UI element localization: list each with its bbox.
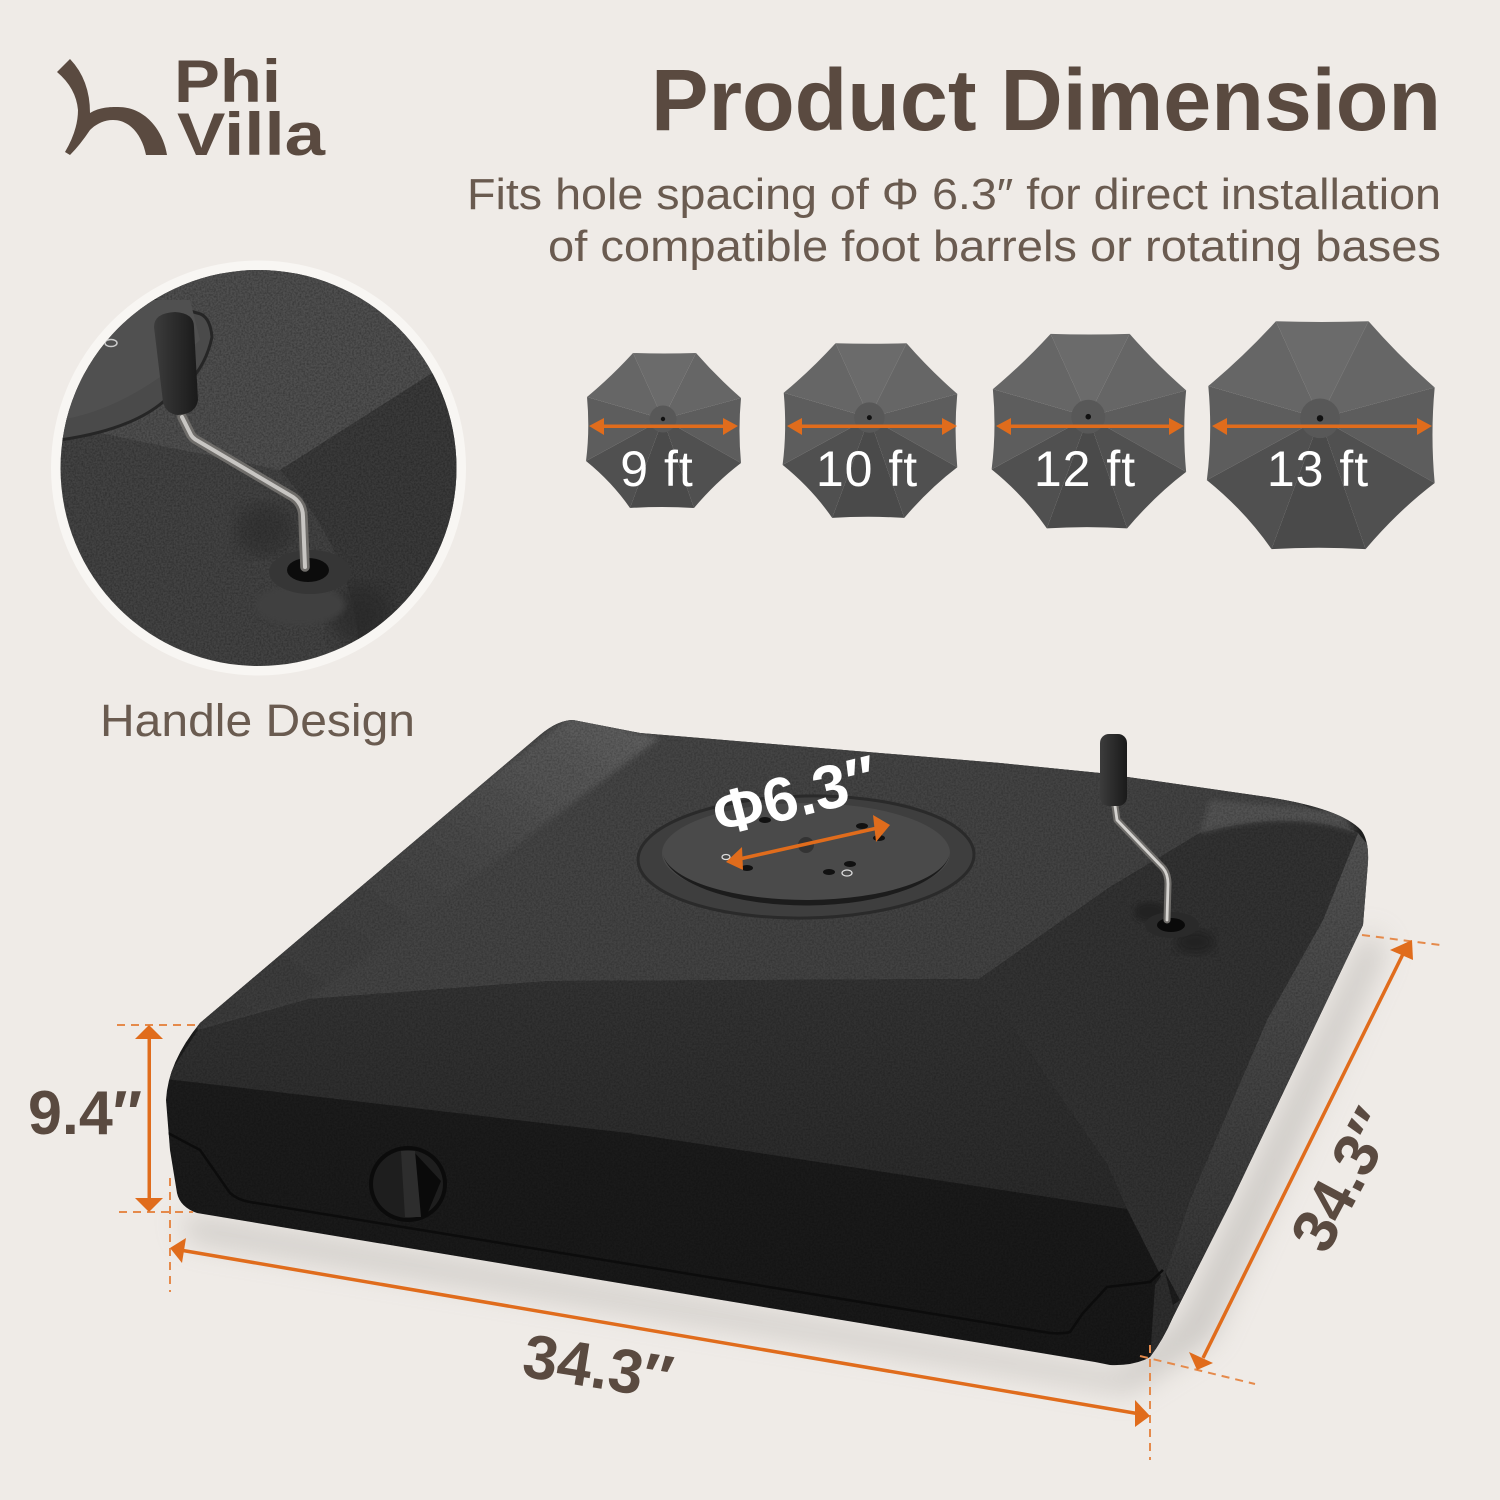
logo word: Villa: Villa	[177, 101, 326, 168]
canopy	[992, 334, 1186, 528]
label: 13 ft	[1267, 441, 1369, 497]
hole spacing arrow	[726, 815, 890, 870]
handle photo	[60, 270, 460, 670]
mounting plate	[637, 793, 975, 921]
depth label: 34.3″	[1278, 1098, 1409, 1263]
circle frame	[51, 260, 466, 676]
handle design caption: Handle Design	[100, 695, 415, 746]
left bevel	[190, 715, 660, 1030]
base body	[150, 700, 1390, 1380]
top-right corner highlight	[1200, 800, 1358, 833]
umbrella base product	[150, 700, 1390, 1380]
top face	[190, 715, 1358, 1030]
width dimension arrow	[170, 1238, 1150, 1427]
hole spacing label: Φ6.3″	[706, 743, 884, 850]
label: 9 ft	[620, 441, 694, 497]
umbrella size: 9 ft	[586, 353, 741, 508]
span arrow	[1212, 418, 1432, 435]
width label: 34.3″	[518, 1322, 678, 1413]
subtitle line 1: Fits hole spacing of Φ 6.3″ for direct installation	[467, 170, 1441, 219]
right slope	[979, 820, 1358, 1280]
base shadow	[180, 930, 1385, 1392]
dashed extension lines	[117, 935, 1440, 1460]
umbrella size: 13 ft	[1207, 321, 1435, 549]
side plug	[369, 1146, 447, 1222]
canopy	[1207, 321, 1435, 549]
logo word: Phi: Phi	[174, 48, 281, 115]
logo mark	[57, 59, 167, 155]
label: 12 ft	[1034, 441, 1136, 497]
span arrow	[589, 418, 738, 435]
label: 10 ft	[816, 441, 918, 497]
canopy	[783, 343, 957, 518]
canopy	[586, 353, 741, 508]
height label: 9.4″	[28, 1079, 142, 1148]
right edge strip	[1150, 833, 1372, 1360]
depth dimension arrow	[1189, 940, 1413, 1370]
crank handle	[1100, 734, 1215, 954]
front corner	[1150, 1276, 1176, 1357]
subtitle	[467, 170, 1441, 271]
umbrella size: 12 ft	[992, 334, 1186, 528]
front slope	[166, 979, 1127, 1209]
subtitle line 2: of compatible foot barrels or rotating bases	[548, 222, 1441, 271]
span arrow	[787, 418, 957, 435]
title: Product Dimension	[651, 52, 1441, 149]
span arrow	[996, 418, 1184, 435]
logo: PhiVilla	[57, 48, 326, 168]
panel: handle design detail	[51, 260, 466, 676]
lower trim line	[168, 1133, 1163, 1333]
umbrella size: 10 ft	[783, 343, 957, 518]
height dimension arrow	[135, 1025, 163, 1212]
